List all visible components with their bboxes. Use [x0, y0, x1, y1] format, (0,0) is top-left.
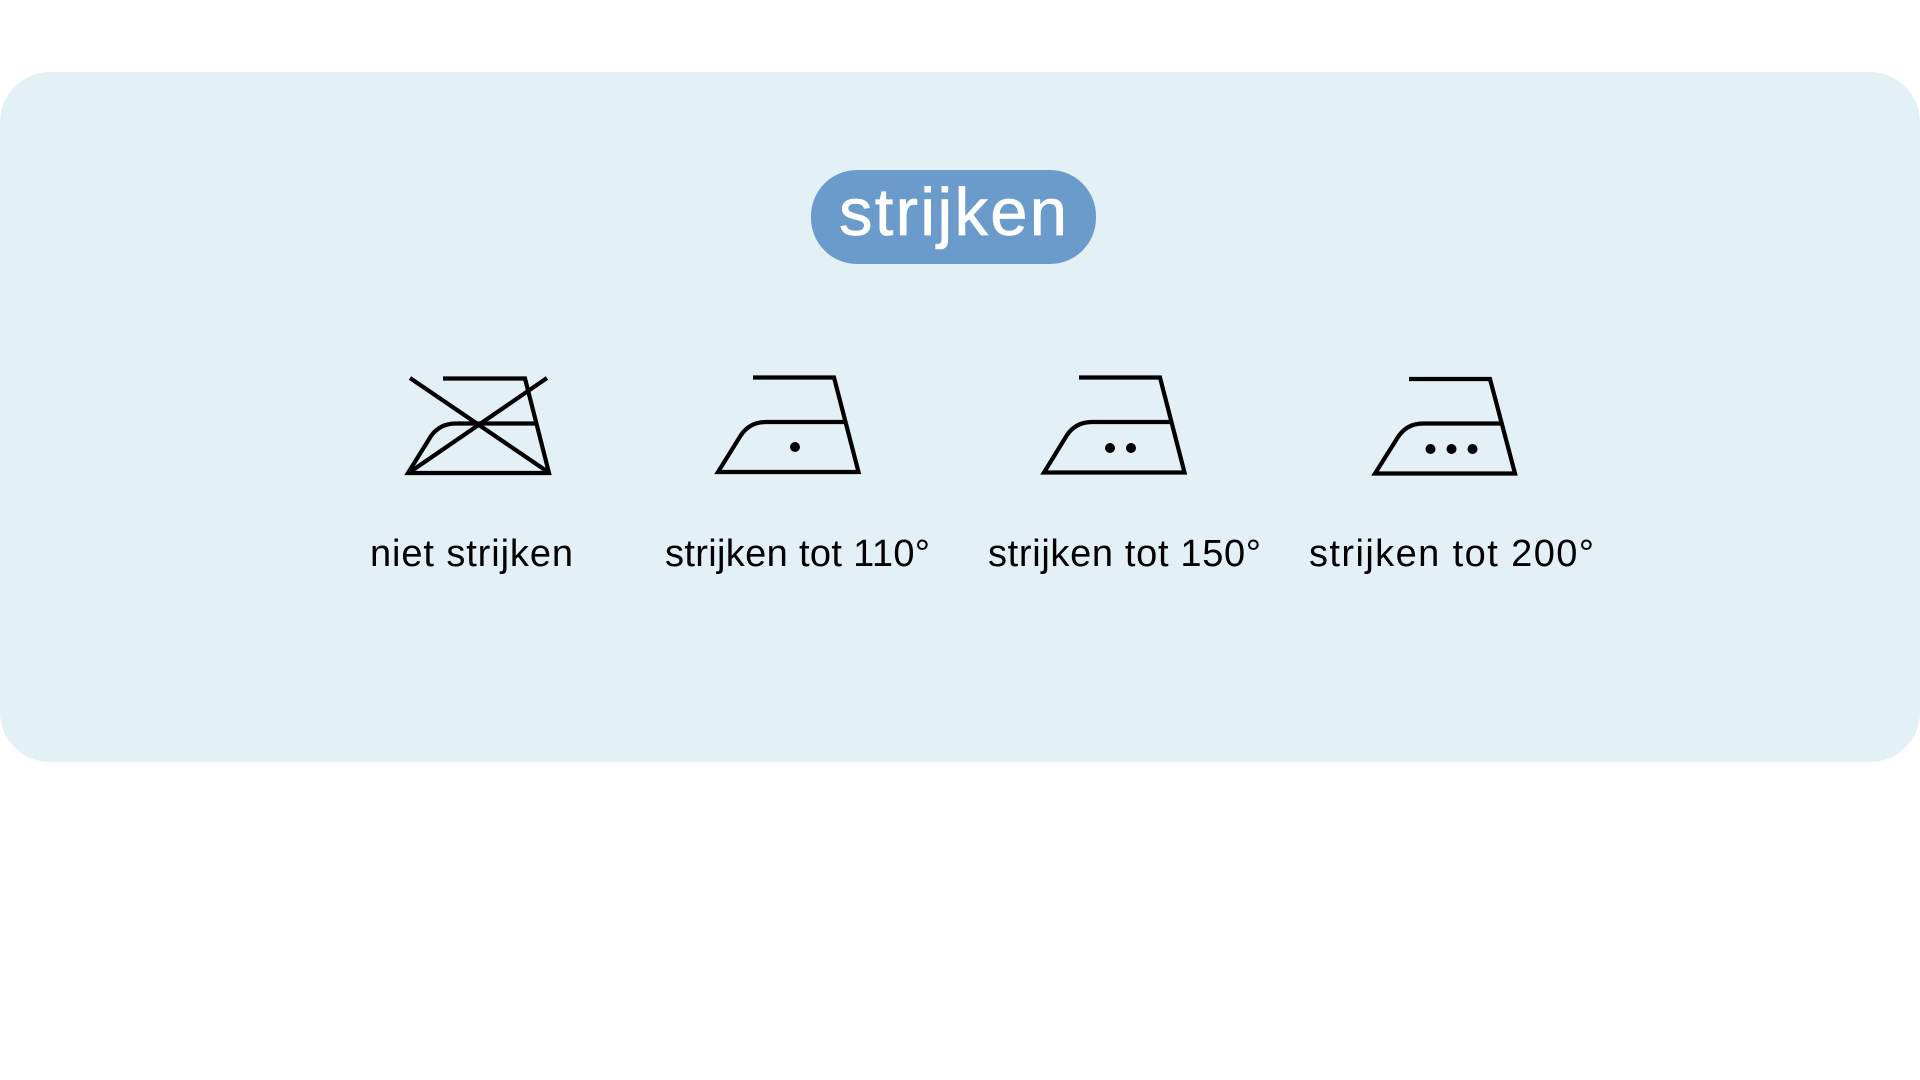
- icon: iron crossed out, no ironing: [408, 378, 549, 473]
- title pill: [811, 170, 1096, 264]
- label: strijken tot 200: strijken tot 200°: [1309, 533, 1594, 575]
- icon: iron one dot: [718, 378, 858, 472]
- icon: iron two dots: [1044, 378, 1184, 472]
- label: niet strijken: niet strijken: [370, 533, 573, 575]
- icon: iron three dots: [1375, 379, 1515, 474]
- title pill: strijken: [839, 175, 1067, 250]
- panel: strijken: [0, 72, 1920, 762]
- label: strijken tot 150: strijken tot 150°: [988, 533, 1261, 575]
- label: strijken tot 110: strijken tot 110°: [665, 533, 930, 575]
